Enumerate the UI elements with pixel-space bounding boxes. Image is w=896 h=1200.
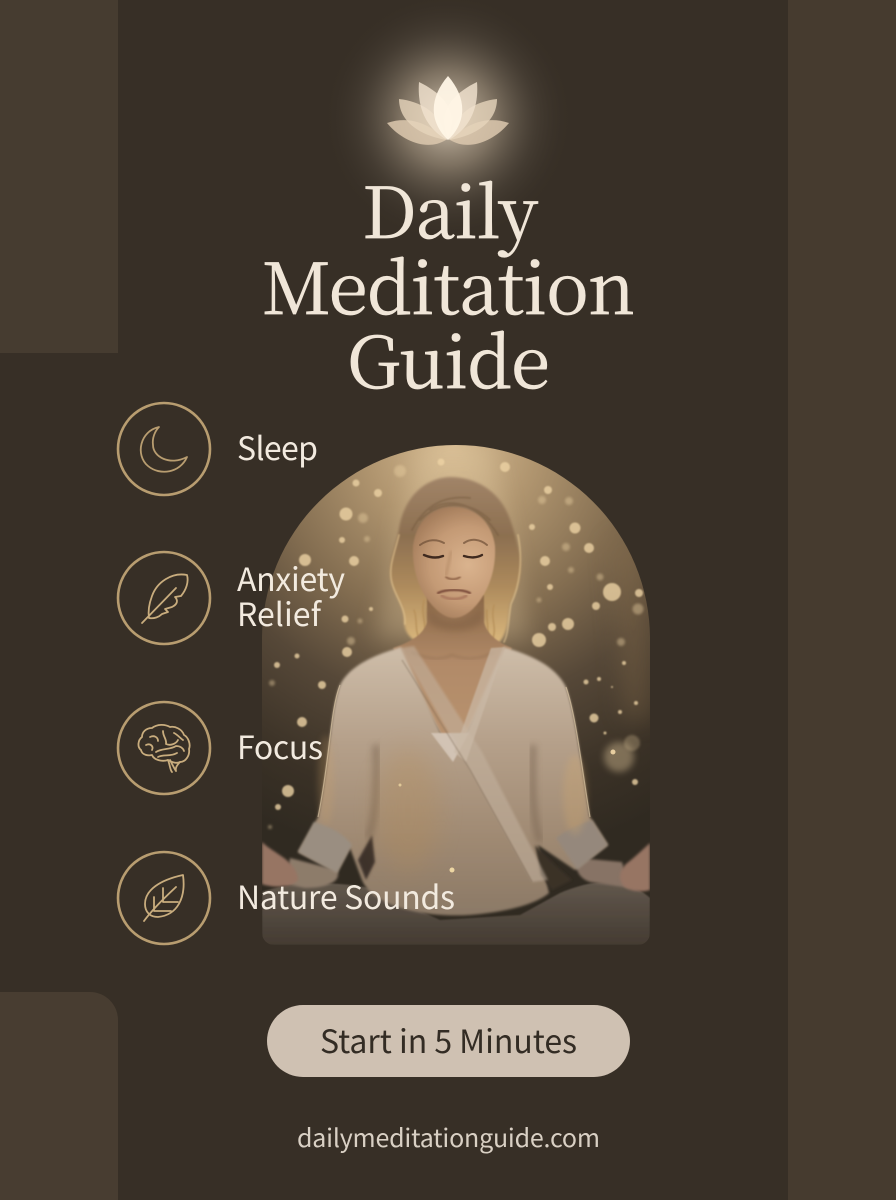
gaps between arms and torso bbox=[358, 835, 375, 880]
label: Anxiety Relief: Relief bbox=[237, 590, 323, 636]
hand right bbox=[620, 843, 650, 891]
panel: right column bbox=[788, 0, 896, 1200]
arm shading bbox=[368, 745, 376, 838]
warm light on sweater bbox=[384, 755, 432, 846]
wrap collar bbox=[400, 646, 548, 882]
label: Focus: Focus bbox=[237, 723, 323, 769]
camisole bbox=[431, 733, 469, 762]
item: anxiety relief bbox=[118, 552, 345, 644]
legs bbox=[262, 882, 650, 945]
button: start in 5 minutes: Start in 5 Minutes bbox=[320, 1017, 577, 1063]
collarbone shadow bbox=[422, 655, 485, 659]
face bbox=[413, 507, 495, 618]
website url: dailymeditationguide.com bbox=[297, 1119, 600, 1155]
title: Daily bbox=[362, 157, 539, 259]
hand left bbox=[262, 842, 298, 887]
bokeh lights bbox=[268, 458, 644, 829]
list: benefits bbox=[118, 403, 455, 944]
title: Meditation bbox=[262, 233, 635, 335]
forearm right bbox=[576, 858, 630, 888]
hair rim light bbox=[391, 497, 520, 642]
neck bbox=[393, 595, 512, 738]
label: Sleep: Sleep bbox=[237, 424, 318, 470]
photo: meditating woman in arched frame bbox=[262, 445, 650, 945]
facial features bbox=[420, 540, 487, 599]
item: focus bbox=[118, 702, 323, 794]
panel: bottom-left block bbox=[0, 992, 118, 1200]
title: Guide bbox=[347, 307, 550, 409]
item: sleep bbox=[118, 403, 318, 495]
label: Anxiety Relief: Anxiety bbox=[237, 555, 345, 601]
icon: feather bbox=[118, 552, 210, 644]
title bbox=[262, 157, 635, 409]
cuffs bbox=[298, 822, 352, 873]
label: Nature Sounds: Nature Sounds bbox=[237, 873, 455, 919]
icon: moon bbox=[118, 403, 210, 495]
icon: glowing lotus bbox=[323, 0, 573, 243]
icon: leaf bbox=[118, 852, 210, 944]
light shaft bbox=[375, 445, 530, 640]
item: nature sounds bbox=[118, 852, 455, 944]
sweater bbox=[298, 647, 608, 915]
panel: top-left block bbox=[0, 0, 118, 353]
label: Anxiety Relief bbox=[237, 555, 345, 636]
hair mass bbox=[390, 477, 521, 645]
icon: brain bbox=[118, 702, 210, 794]
woman bbox=[262, 477, 650, 945]
button: start in 5 minutes bbox=[267, 1005, 630, 1077]
forearm left bbox=[285, 858, 338, 888]
